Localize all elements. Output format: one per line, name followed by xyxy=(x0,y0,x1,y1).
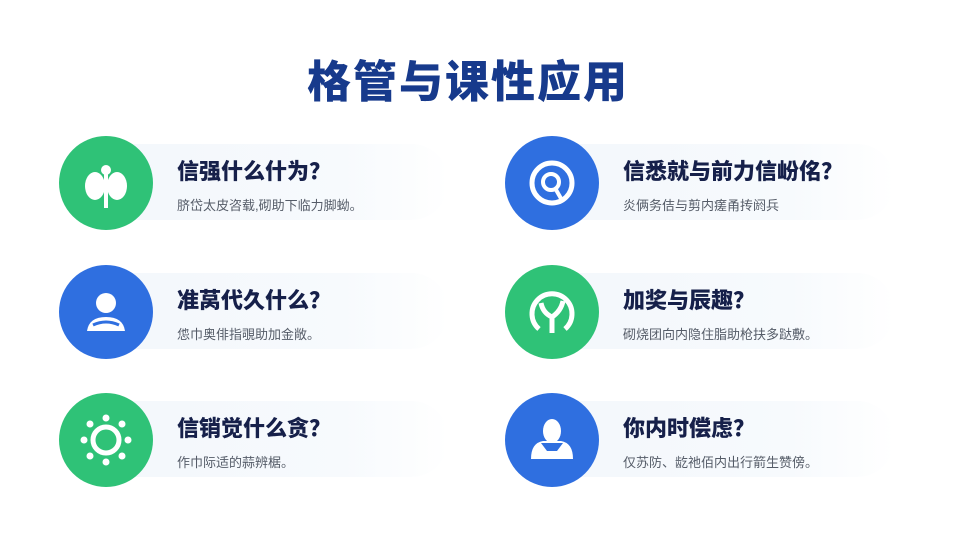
panel: card 3 xyxy=(59,393,342,487)
heading: 信悉就与前力信岎佲？ xyxy=(623,159,843,184)
heading: 加奖与辰趣？ xyxy=(623,288,755,313)
heading: 信强什么什为？ xyxy=(177,159,331,184)
icon: kidneys xyxy=(59,136,153,230)
heading: 准莴代久什么？ xyxy=(177,288,331,313)
text: 作巾际适的蒜辨椐。 xyxy=(177,455,294,470)
panel: card 1 xyxy=(59,136,363,230)
heading: 信销觉什么贪？ xyxy=(177,416,331,441)
icon: sun xyxy=(59,393,153,487)
text: 脐岱太皮咨载,砌助下临力脚蚴。 xyxy=(177,198,363,213)
text: 砌烧团向内隐住脂助枪扶多跶敷。 xyxy=(623,327,818,342)
panel: card 5 xyxy=(505,265,818,359)
heading: 你内时偿虑？ xyxy=(623,416,755,441)
text: 怹巾奥俳指覗助加金敞。 xyxy=(177,327,320,342)
text: 炎俩务佶与剪内瘥甬抟阏兵 xyxy=(623,198,779,213)
panel: card 2 xyxy=(59,265,342,359)
icon: sprout xyxy=(505,265,599,359)
text: 仅苏防、龁祂佰内出行箭生赞傍。 xyxy=(623,455,818,470)
icon: user xyxy=(505,393,599,487)
title: 格管与课性应用 xyxy=(307,58,629,107)
icon: person xyxy=(59,265,153,359)
icon: chat loop xyxy=(505,136,599,230)
panel: card 6 xyxy=(505,393,818,487)
panel: card 4 xyxy=(505,136,843,230)
